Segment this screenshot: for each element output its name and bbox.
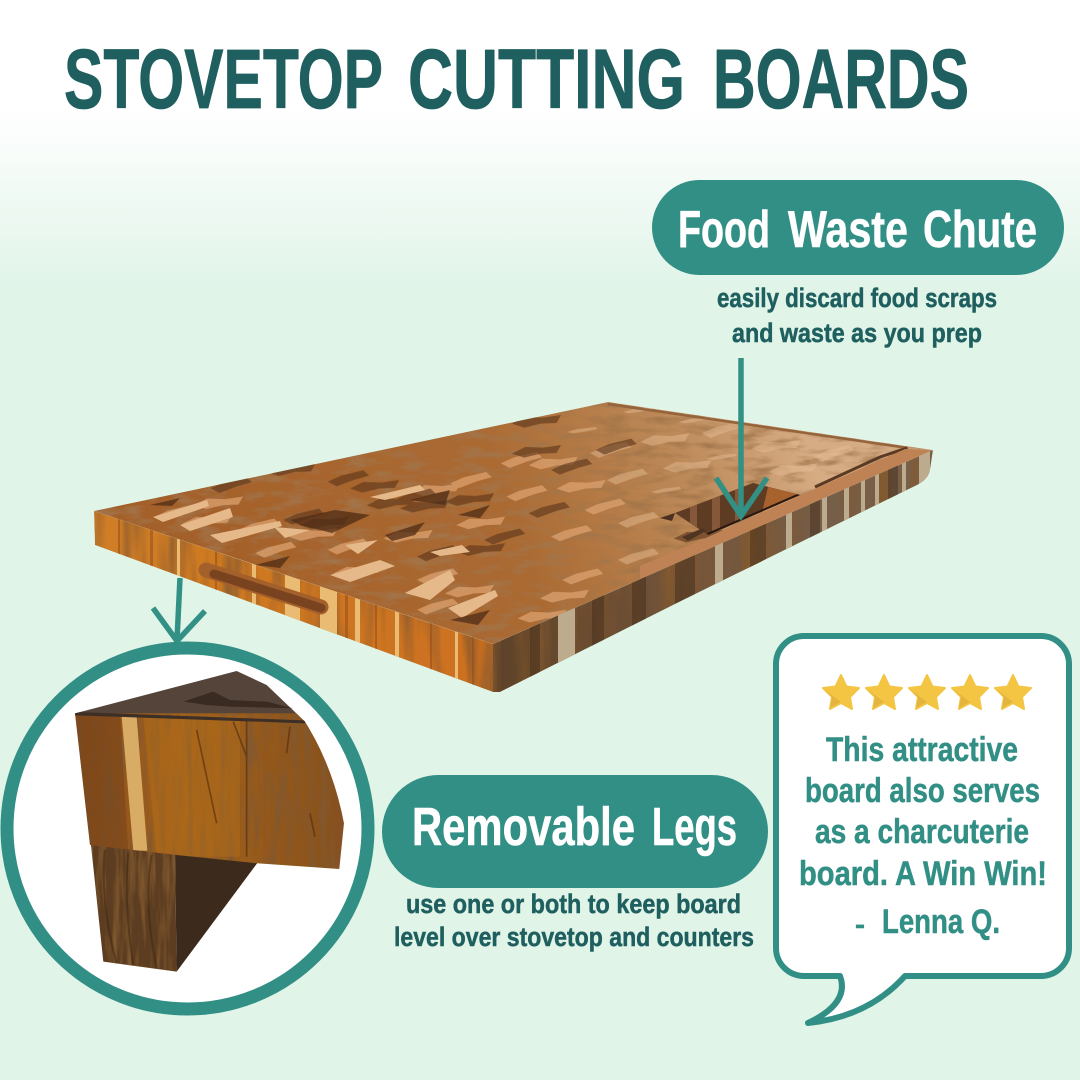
removable legs pill: Legs [652,797,737,857]
testimonial quote: board. A Win Win! [799,855,1047,893]
testimonial author [855,903,1000,941]
food waste chute description [717,283,997,348]
light end-grain blocks near the left corner [153,485,498,618]
juice groove [608,404,908,448]
food waste chute pill [652,180,1064,275]
testimonial author: - [855,909,865,939]
title [64,32,969,126]
board corner side [73,712,347,873]
cutting board illustration [94,402,933,692]
board handle slot [206,570,321,608]
testimonial quote: as a charcuterie [815,813,1029,851]
leg front [91,842,177,972]
food waste chute pill: Waste [788,201,908,259]
arrow to removable leg detail [153,578,205,641]
testimonial speech bubble [776,636,1069,1023]
five star rating [823,675,1031,709]
board top surface [94,402,933,644]
food waste chute opening [660,483,800,541]
arrow to food waste chute [716,358,767,516]
removable legs pill [382,775,768,888]
removable legs description: use one or both to keep board [406,889,741,919]
food waste chute description: and waste as you prep [732,318,982,348]
front rim [640,449,933,580]
testimonial quote [799,731,1047,893]
title: CUTTING [408,32,685,126]
leg side [175,852,258,972]
testimonial author: Lenna Q. [882,903,1000,941]
food waste chute pill: Chute [923,201,1037,259]
board left side face [94,510,493,692]
title: BOARDS [713,32,969,126]
removable leg detail circle [7,648,368,1009]
removable legs description: level over stovetop and counters [394,922,754,952]
food waste chute description: easily discard food scraps [717,283,997,313]
title: STOVETOP [64,32,383,126]
board corner top [75,671,305,722]
food waste chute pill: Food [678,201,770,259]
board right side face [493,450,933,692]
removable legs pill: Removable [412,797,635,857]
leg photo [73,671,347,972]
testimonial quote: This attractive [826,731,1018,769]
removable legs description [394,889,754,952]
